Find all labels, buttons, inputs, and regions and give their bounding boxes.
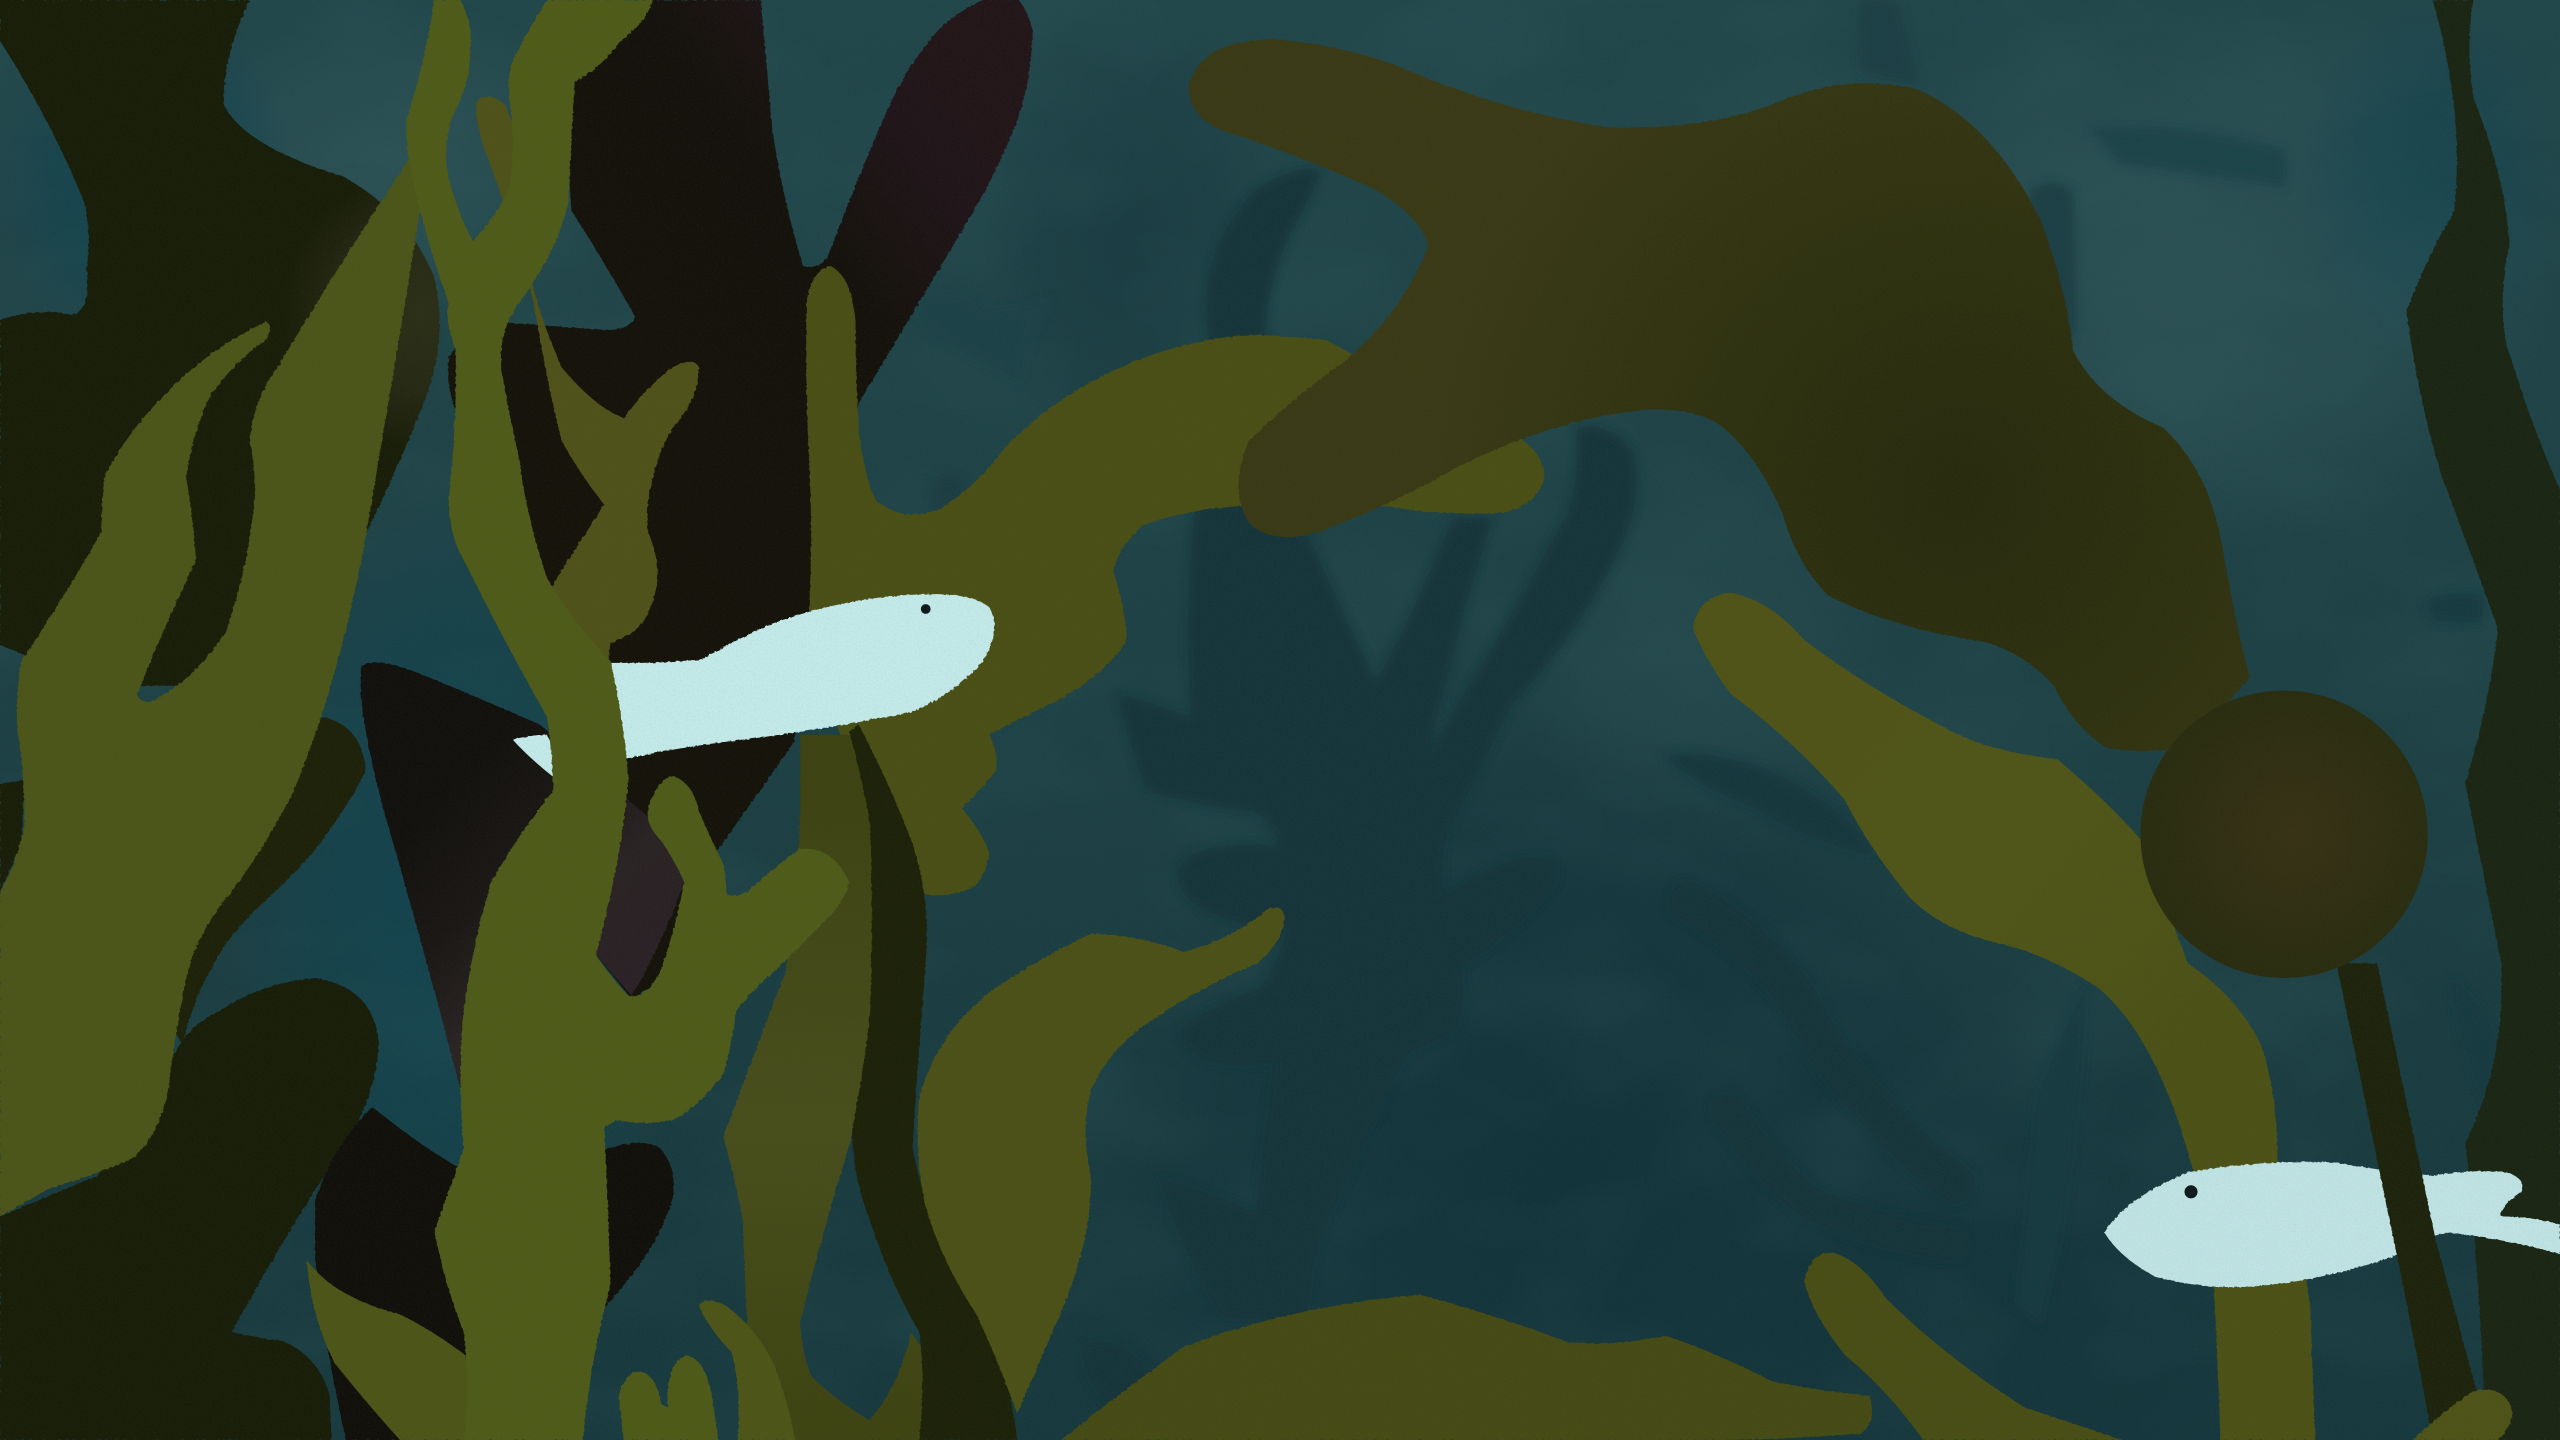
kelp stalk: right xyxy=(2336,963,2490,1440)
dark kelp: behind left frond xyxy=(163,717,366,1045)
olive kelp: middle arm xyxy=(806,266,1544,895)
kelp float bulb xyxy=(2140,691,2428,978)
olive kelp: small bottom sprigs xyxy=(619,1355,718,1440)
olive kelp: small bottom left frond xyxy=(307,1260,482,1440)
fish eye xyxy=(921,604,931,614)
silhouette: central kelp xyxy=(1117,168,1637,1326)
dark brown kelp: left triangle xyxy=(361,662,686,1102)
dark kelp: right edge xyxy=(2407,0,2560,1440)
silhouette: right bands xyxy=(1688,901,1956,1184)
olive kelp: left frond xyxy=(0,98,444,1216)
fish eye xyxy=(2184,1185,2198,1198)
dark kelp: upper left xyxy=(0,0,440,686)
dark brown kelp: bottom xyxy=(315,1107,674,1440)
olive kelp: bottom right frond xyxy=(1804,1252,2122,1440)
dark ribbon kelp xyxy=(849,725,1017,1440)
olive kelp: lower middle frond xyxy=(918,907,1285,1414)
silhouette: fish shape top xyxy=(908,294,1053,384)
olive kelp: bottom frond xyxy=(1061,1295,1872,1440)
dark brown kelp: centre top xyxy=(448,0,1033,999)
background kelp silhouettes xyxy=(908,0,2514,1404)
dark kelp: side sliver xyxy=(0,780,24,891)
olive kelp: central stem xyxy=(406,0,849,1440)
fish: lower right xyxy=(2104,1162,2560,1287)
dark kelp: lower left xyxy=(0,978,379,1440)
olive kelp: upper branch behind stem xyxy=(476,97,699,666)
olive kelp: right frond xyxy=(1693,593,2315,1440)
small olive tip: bottom right corner xyxy=(2413,1390,2513,1440)
olive kelp: lower stalk xyxy=(723,735,939,1440)
large dark olive kelp: top right xyxy=(1189,39,2250,751)
olive kelp: bottom curl xyxy=(699,1300,795,1440)
fish: centre xyxy=(513,594,995,777)
